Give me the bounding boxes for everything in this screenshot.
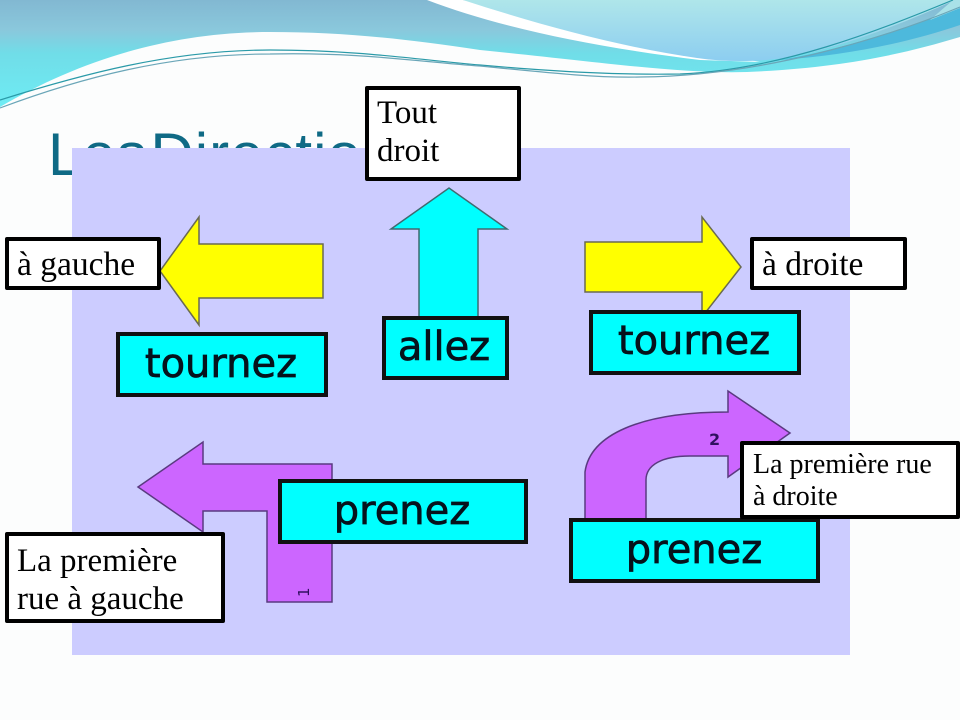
callout: à gauche bbox=[5, 237, 161, 290]
icon: purple arrow left turn: 1 bbox=[295, 587, 313, 597]
icon: cyan arrow up bbox=[391, 188, 507, 320]
callout: la première rue à gauche bbox=[5, 532, 225, 623]
callout: à droite bbox=[750, 237, 907, 290]
callout: à droite: à droite bbox=[762, 246, 863, 283]
icon: yellow arrow left bbox=[160, 217, 323, 325]
icon: purple arrow right turn bbox=[585, 391, 790, 522]
label: tournez right: tournez bbox=[618, 318, 770, 364]
icon: yellow arrow right bbox=[585, 217, 741, 317]
label: tournez right bbox=[591, 312, 799, 373]
callout: à gauche: à gauche bbox=[17, 246, 135, 283]
label: prenez left: prenez bbox=[334, 488, 470, 534]
label: prenez right bbox=[571, 520, 818, 581]
title: Les Directions bbox=[48, 121, 427, 188]
icon: purple arrow right turn: 2 bbox=[709, 430, 720, 449]
label: prenez right: prenez bbox=[626, 527, 762, 573]
label: allez bbox=[384, 318, 507, 378]
callout: tout droit: droit bbox=[377, 133, 439, 169]
label: prenez left bbox=[280, 481, 526, 542]
callout: la première rue à droite: à droite bbox=[753, 481, 838, 512]
callout: la première rue à gauche: La première bbox=[17, 543, 177, 579]
callout: tout droit: Tout bbox=[377, 95, 437, 131]
callout: la première rue à droite bbox=[740, 441, 960, 519]
callout: la première rue à gauche: rue à gauche bbox=[17, 581, 184, 617]
label: tournez left bbox=[118, 334, 326, 395]
callout: la première rue à droite: La première rue bbox=[753, 449, 932, 480]
label: tournez left: tournez bbox=[145, 341, 297, 387]
callout: tout droit bbox=[365, 86, 521, 181]
label: allez: allez bbox=[398, 324, 490, 370]
icon: purple arrow left turn bbox=[138, 442, 332, 602]
